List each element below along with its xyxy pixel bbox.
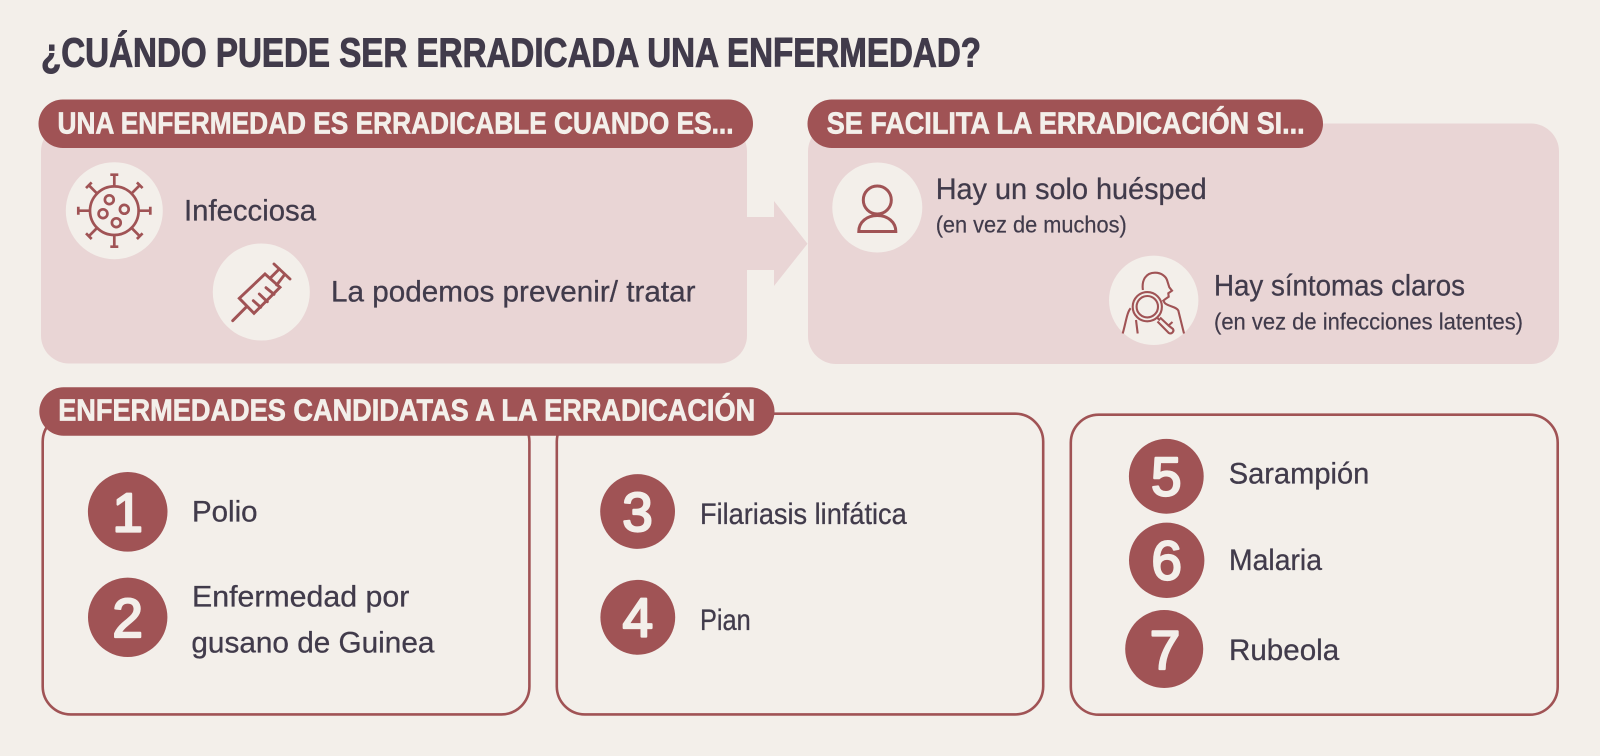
panel heading: ENFERMEDADES CANDIDATAS A LA ERRADICACIÓN <box>58 392 755 428</box>
number 5: 5 <box>1151 446 1182 508</box>
text: un solo huésped: Hay un solo huésped <box>936 173 1207 206</box>
card: sarampión, malaria, rubeola <box>1071 415 1558 715</box>
label: malaria: Malaria <box>1229 544 1322 577</box>
number 7 <box>1125 610 1203 688</box>
number 5 <box>1129 439 1204 514</box>
panel heading <box>808 100 1323 148</box>
label: polio: Polio <box>192 496 258 529</box>
title: ¿CUÁNDO PUEDE SER ERRADICADA UNA ENFERMEDAD? <box>41 30 981 76</box>
text: síntomas claros: Hay síntomas claros <box>1214 270 1465 303</box>
icon: person <box>832 162 922 252</box>
panel: una enfermedad es erradicable <box>38 100 753 364</box>
number 4 <box>600 580 675 655</box>
icon: virus <box>66 162 163 259</box>
panel heading <box>38 100 753 148</box>
number 1: 1 <box>112 482 143 544</box>
label: sarampión: Sarampión <box>1229 457 1369 490</box>
number 4: 4 <box>623 586 653 648</box>
number 2: 2 <box>112 587 143 649</box>
panel heading: SE FACILITA LA ERRADICACIÓN SI... <box>827 104 1305 140</box>
icon: syringe <box>213 244 310 340</box>
panel: se facilita la erradicación <box>808 100 1559 364</box>
number 1 <box>88 472 168 552</box>
label: infecciosa: Infecciosa <box>184 195 316 228</box>
number 3: 3 <box>622 481 653 543</box>
text: un solo huésped: (en vez de muchos) <box>936 212 1127 238</box>
text: síntomas claros: (en vez de infecciones latentes) <box>1214 308 1523 334</box>
number 2 <box>88 578 167 657</box>
card: filariasis y pian <box>557 414 1043 714</box>
panel: enfermedades candidatas <box>39 387 1558 715</box>
arrow <box>747 201 808 286</box>
panel heading <box>39 387 775 436</box>
panel background <box>41 124 747 364</box>
label: filariasis linfática: Filariasis linfática <box>700 498 907 531</box>
icon: symptoms magnifier <box>1109 256 1198 345</box>
label: pian: Pian <box>700 604 751 637</box>
number 6: 6 <box>1151 530 1182 592</box>
panel heading: UNA ENFERMEDAD ES ERRADICABLE CUANDO ES... <box>58 105 734 140</box>
number 3 <box>600 474 675 549</box>
text: un solo huésped <box>936 173 1207 238</box>
number 6 <box>1129 523 1204 598</box>
text: síntomas claros <box>1214 270 1523 334</box>
label: enfermedad por gusano de Guinea: Enfermedad por <box>192 581 409 614</box>
label: enfermedad por gusano de Guinea: gusano de Guinea <box>191 627 435 660</box>
panel background <box>808 124 1559 364</box>
card: polio y gusano de Guinea <box>43 414 529 714</box>
number 7: 7 <box>1150 619 1180 681</box>
label: enfermedad por gusano de Guinea <box>191 581 435 660</box>
label: la podemos prevenir: La podemos prevenir/ tratar <box>331 276 696 309</box>
label: rubeola: Rubeola <box>1229 634 1339 667</box>
